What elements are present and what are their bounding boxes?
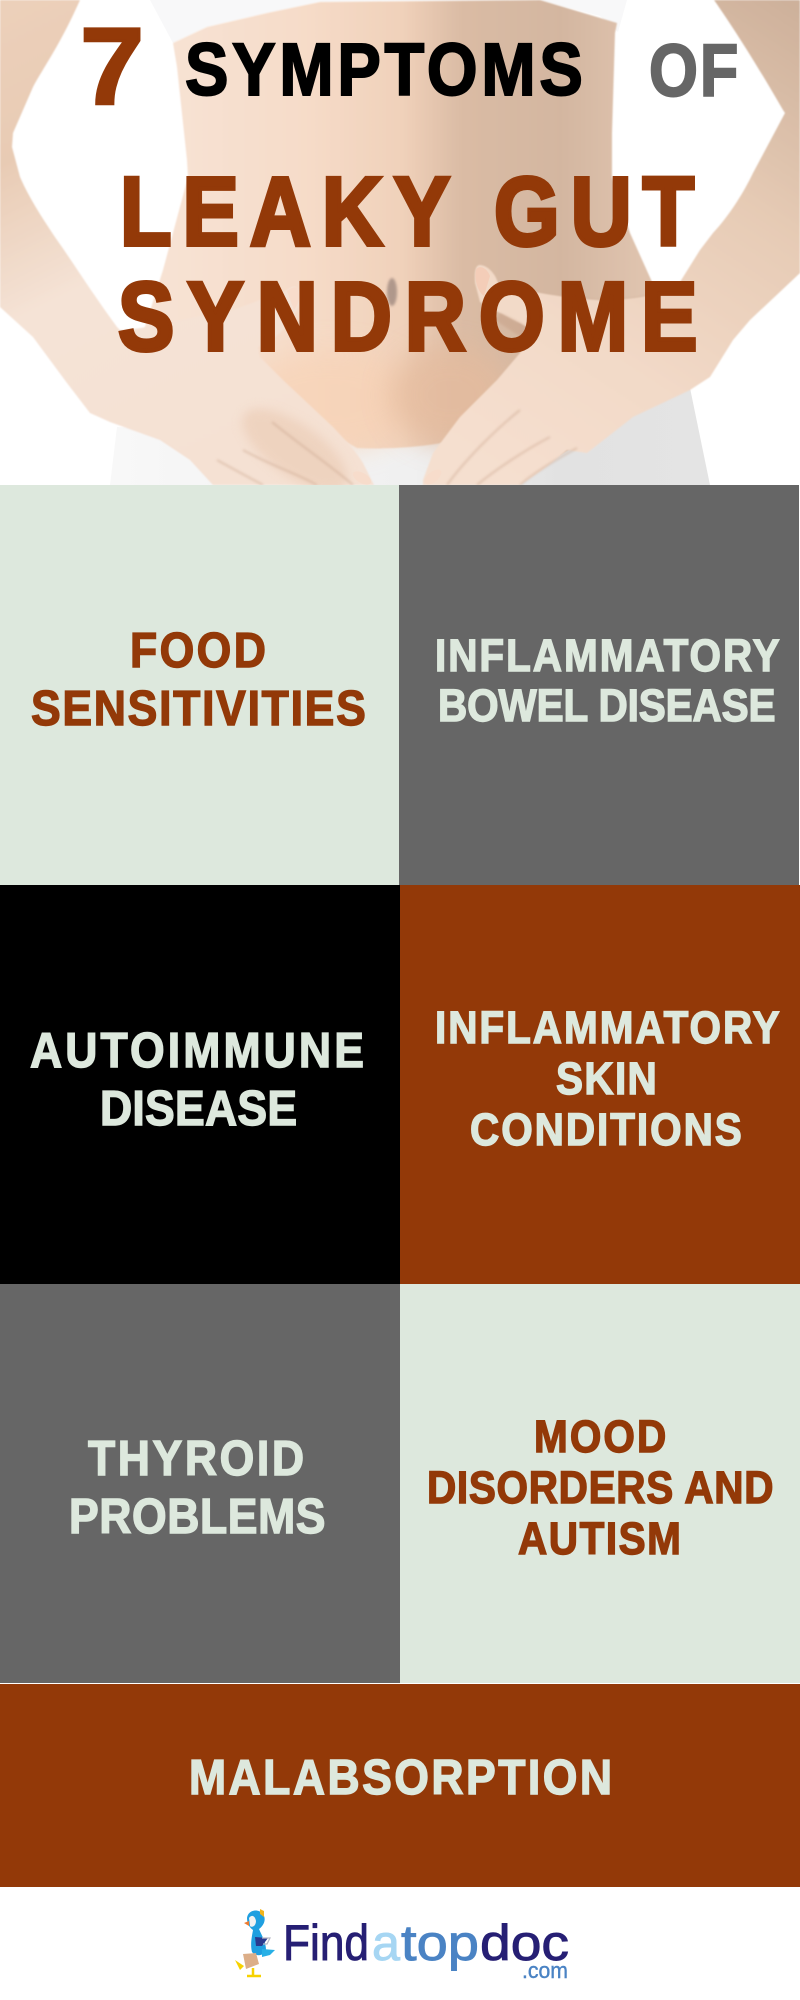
- photo: abdomen: [143, 0, 690, 455]
- panel: inflammatory skin conditions: CONDITIONS: [470, 1105, 742, 1156]
- panel: autoimmune disease: AUTOIMMUNE: [30, 1022, 364, 1078]
- panel: mood disorders and autism: DISORDERS AND: [427, 1463, 774, 1514]
- panel: inflammatory skin conditions: [400, 885, 800, 1284]
- logo wordmark: doc: [480, 1915, 569, 1971]
- panel: inflammatory skin conditions: SKIN: [556, 1054, 657, 1105]
- title word OF: OF: [649, 29, 738, 112]
- photo: right arm and hand: [422, 0, 800, 487]
- panel: inflammatory bowel disease: BOWEL DISEASE: [438, 681, 776, 732]
- panel: food sensitivities: SENSITIVITIES: [31, 680, 366, 736]
- photo: left arm and hand: [0, 0, 374, 507]
- photo: white top: [150, 0, 627, 43]
- panel: mood disorders and autism: [400, 1284, 800, 1683]
- title number 7: 7: [80, 5, 144, 127]
- panel: mood disorders and autism: AUTISM: [518, 1514, 681, 1565]
- title: 7 symptoms of leaky gut syndrome: [80, 5, 738, 371]
- logo wordmark: Find: [283, 1915, 369, 1971]
- logo wordmark: [283, 1915, 569, 1983]
- icon: duck mascot with bandage: [235, 1909, 275, 1976]
- panel: food sensitivities: [0, 485, 399, 885]
- panel: thyroid problems: THYROID: [88, 1430, 304, 1486]
- panel: inflammatory bowel disease: [399, 485, 799, 885]
- panel: inflammatory bowel disease: INFLAMMATORY: [435, 631, 780, 682]
- panel: autoimmune disease: [0, 885, 400, 1284]
- title line LEAKY GUT: LEAKY GUT: [120, 159, 694, 266]
- panel: inflammatory skin conditions: INFLAMMATORY: [435, 1003, 780, 1054]
- panel: mood disorders and autism: MOOD: [534, 1412, 666, 1463]
- panel: malabsorption: MALABSORPTION: [189, 1749, 612, 1805]
- panel: thyroid problems: PROBLEMS: [69, 1488, 326, 1544]
- panel: food sensitivities: FOOD: [130, 622, 266, 678]
- logo wordmark: a: [372, 1915, 400, 1971]
- logo: findatopdoc.com: [235, 1909, 569, 1983]
- logo wordmark: .com: [522, 1958, 568, 1983]
- panel: thyroid problems: [0, 1284, 400, 1683]
- panel: autoimmune disease: DISEASE: [100, 1080, 297, 1136]
- logo wordmark: top: [401, 1915, 479, 1971]
- title line SYNDROME: SYNDROME: [118, 264, 697, 371]
- title word SYMPTOMS: SYMPTOMS: [185, 28, 583, 111]
- photo: white briefs: [110, 388, 710, 485]
- panel: malabsorption: [0, 1684, 800, 1887]
- header photo: torso with hands on belly: [0, 0, 800, 507]
